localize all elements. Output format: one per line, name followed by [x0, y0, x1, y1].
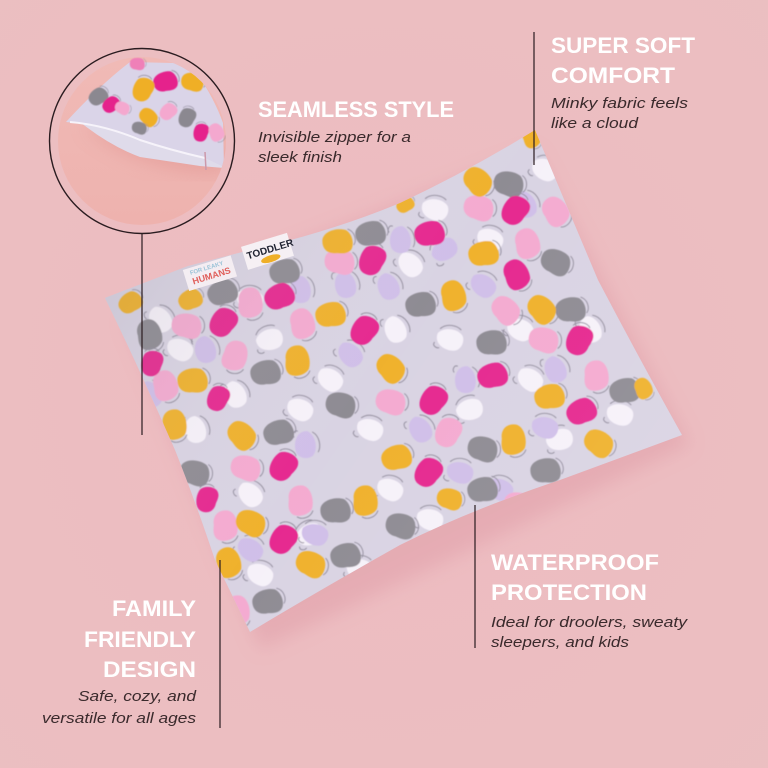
- callout: waterproof protection: Ideal for droolers, sweaty: [491, 615, 688, 631]
- callout: waterproof protection: [491, 550, 688, 651]
- callout: seamless style: sleek finish: [258, 150, 342, 166]
- tag: for leaky humans: HUMANS: [191, 265, 232, 286]
- tag: toddler: [241, 232, 298, 270]
- callout inset: zipper circle: [50, 48, 234, 234]
- callout: super soft comfort: COMFORT: [551, 63, 676, 88]
- callout: super soft comfort: [551, 33, 696, 132]
- callout: seamless style: Invisible zipper for a: [258, 130, 411, 146]
- callout: seamless style: [258, 97, 454, 166]
- pillow shadow: [125, 150, 690, 650]
- tag: for leaky humans: [183, 255, 237, 291]
- tag: for leaky humans: FOR LEAKY: [189, 261, 224, 277]
- pillow with cat print: [105, 130, 682, 632]
- callout: waterproof protection: WATERPROOF: [491, 550, 659, 575]
- leader line: family friendly design: [219, 560, 221, 728]
- pillow corner: [66, 62, 224, 167]
- tag: toddler: TODDLER: [246, 237, 296, 262]
- callout: family friendly design: versatile for all ages: [42, 711, 196, 727]
- callout: seamless style: SEAMLESS STYLE: [258, 97, 454, 122]
- callout: super soft comfort: SUPER SOFT: [551, 33, 696, 58]
- callout: family friendly design: [42, 596, 197, 727]
- callout: waterproof protection: sleepers, and kids: [491, 635, 629, 651]
- lower flap interior: [84, 124, 222, 168]
- zipper opening edge: [70, 122, 205, 158]
- callout: family friendly design: DESIGN: [103, 657, 196, 682]
- callout: family friendly design: FAMILY: [112, 596, 196, 621]
- leader line: seamless style: [141, 234, 143, 435]
- callout: family friendly design: Safe, cozy, and: [78, 689, 197, 705]
- callout: super soft comfort: Minky fabric feels: [551, 96, 688, 112]
- callout: super soft comfort: like a cloud: [551, 116, 639, 132]
- zipper pull: [205, 152, 206, 170]
- leader line: super soft comfort: [533, 32, 535, 165]
- callout: family friendly design: FRIENDLY: [84, 627, 196, 652]
- leader line: waterproof protection: [474, 505, 476, 648]
- callout: waterproof protection: PROTECTION: [491, 580, 647, 605]
